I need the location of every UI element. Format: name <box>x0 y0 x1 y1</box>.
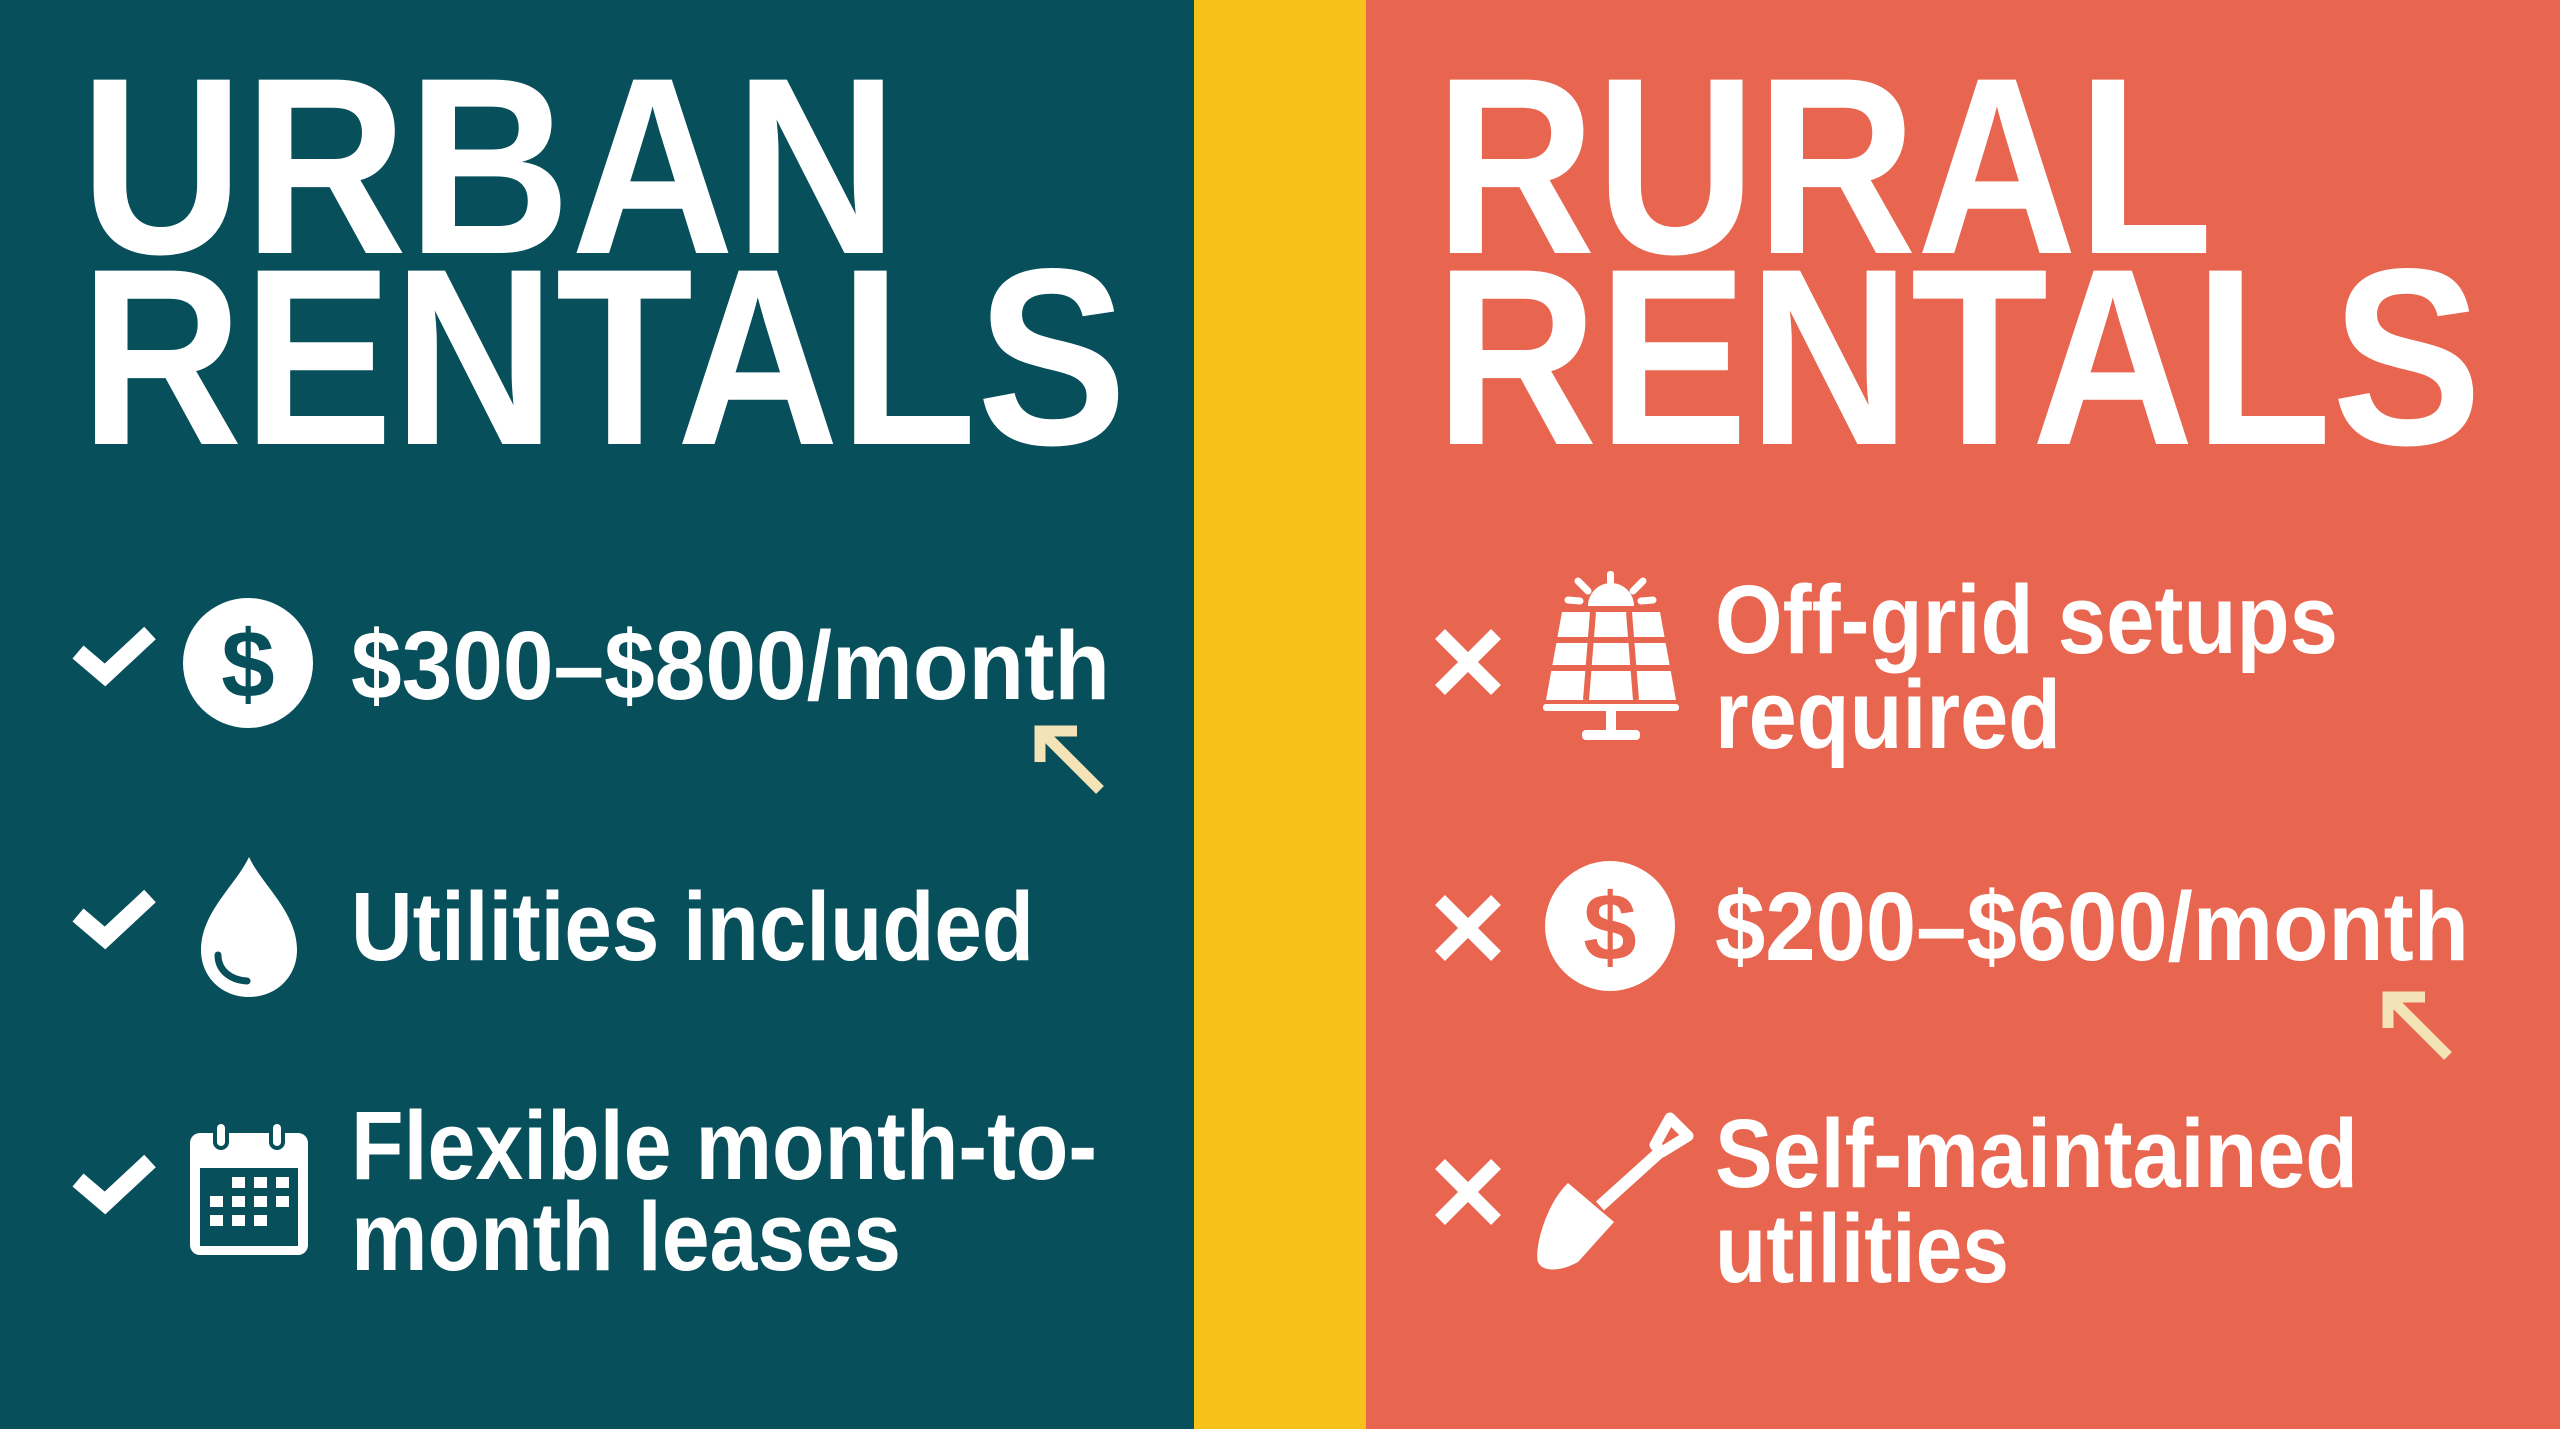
title: rural rentals <box>1435 26 2482 498</box>
arrow: up-left <box>2388 997 2448 1056</box>
text: self-maintained utilities <box>1715 1099 2358 1303</box>
urban item: leases <box>78 1091 1097 1291</box>
title: urban rentals <box>80 26 1127 498</box>
text: self-maintained utilities: Self-maintained <box>1715 1099 2358 1208</box>
title: urban rentals: URBAN <box>80 26 898 307</box>
divider band yellow <box>1194 0 1366 1429</box>
icon: cross <box>1440 634 1496 690</box>
text: utilities included: Utilities included <box>351 872 1034 981</box>
panel: rural background <box>1366 0 2560 1429</box>
text: flexible leases: month leases <box>351 1182 901 1291</box>
text: price: $200–$600/month <box>1715 872 2469 981</box>
icon: dollar coin: $ <box>1583 874 1637 981</box>
title: rural rentals: RURAL <box>1435 26 2213 307</box>
urban item: utilities <box>78 857 1034 997</box>
icon: solar panel <box>1543 571 1679 740</box>
text: flexible leases: Flexible month-to- <box>351 1091 1097 1200</box>
text: self-maintained utilities: utilities <box>1715 1194 2009 1303</box>
icon: cross <box>1440 900 1496 956</box>
icon: check <box>78 633 150 675</box>
icon: shovel <box>1537 1118 1688 1270</box>
panel: urban background <box>0 0 1195 1429</box>
icon: dollar coin <box>183 598 313 728</box>
icon: check <box>78 1161 150 1203</box>
text: price: $300–$800/month <box>351 611 1110 720</box>
text: flexible leases <box>351 1091 1097 1291</box>
text: off-grid setups required: Off-grid setups <box>1715 565 2338 674</box>
rural item: self-maintained <box>1440 1099 2358 1303</box>
rural item: off-grid <box>1440 565 2338 769</box>
text: off-grid setups required: required <box>1715 660 2061 769</box>
icon: dollar coin: $ <box>221 611 275 718</box>
icon: calendar <box>190 1122 308 1255</box>
arrow: up-left <box>1040 731 1100 790</box>
title: urban rentals: RENTALS <box>80 217 1127 498</box>
rural item: price <box>1440 861 2469 1056</box>
icon: cross <box>1440 1164 1496 1220</box>
urban item: price <box>78 598 1110 790</box>
icon: check <box>78 896 150 938</box>
icon: dollar coin <box>1545 861 1675 991</box>
text: off-grid setups required <box>1715 565 2338 769</box>
icon: water drop <box>201 857 297 997</box>
